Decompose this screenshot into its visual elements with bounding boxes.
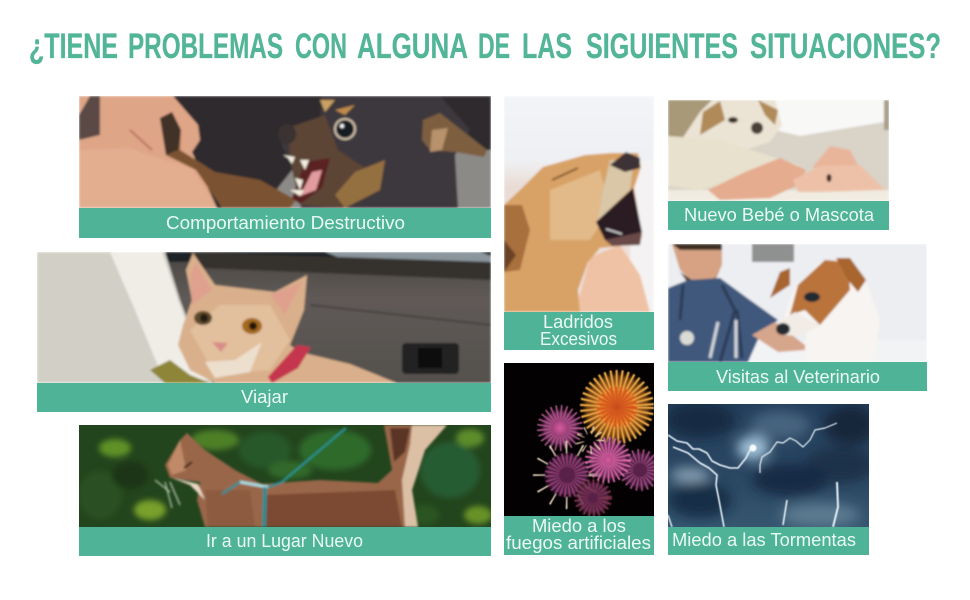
title: ALGUNA <box>357 27 468 66</box>
label bar <box>504 516 654 555</box>
photo: barking golden dog <box>504 96 654 312</box>
title: CON <box>295 27 347 66</box>
panel: ladridos excesivos <box>504 96 654 350</box>
label bar <box>79 208 491 238</box>
photo: storm clouds with lightning <box>665 402 876 527</box>
label text: Excesivos <box>540 329 617 349</box>
label text: Visitas al Veterinario <box>716 367 880 387</box>
label bar <box>504 312 654 350</box>
label text <box>540 312 617 349</box>
label text: Ir a un Lugar Nuevo <box>206 531 363 551</box>
title: SIGUIENTES <box>586 27 738 66</box>
panel: visitas al veterinario <box>668 244 927 391</box>
label bar <box>668 527 869 555</box>
label text: Miedo a las Tormentas <box>672 530 856 550</box>
photo: cat in a car on owner's chest <box>37 252 491 383</box>
panel: miedo a las tormentas <box>665 402 876 555</box>
panel: ir a un lugar nuevo <box>78 425 492 556</box>
photo: cat on harness and leash among foliage <box>78 425 492 527</box>
panel: comportamiento destructivo <box>79 96 491 238</box>
photo: veterinarian with small dog <box>668 244 927 362</box>
title <box>29 27 941 66</box>
label bar <box>668 362 927 391</box>
label bar <box>668 201 889 230</box>
label text: Ladridos <box>543 312 613 332</box>
label text: fuegos artificiales <box>506 533 651 553</box>
title: ¿TIENE <box>29 27 118 66</box>
title: LAS <box>522 27 572 66</box>
panel: viajar <box>37 252 491 412</box>
label text <box>506 516 651 553</box>
label text: Nuevo Bebé o Mascota <box>684 205 875 225</box>
photo: fireworks bursts on black sky <box>504 363 662 518</box>
label bar <box>79 527 491 556</box>
label text: Miedo a los <box>532 516 626 536</box>
photo: puppy watching a newborn baby <box>668 100 889 201</box>
label text: Comportamiento Destructivo <box>166 213 405 233</box>
label bar <box>37 383 491 412</box>
photo: aggressive chihuahua biting a hand <box>79 96 491 208</box>
panel: miedo a los fuegos artificiales <box>504 363 662 555</box>
title: PROBLEMAS <box>128 27 283 66</box>
label text: Viajar <box>241 387 288 407</box>
title: DE <box>478 27 510 66</box>
panel: nuevo bebé o mascota <box>668 100 889 230</box>
